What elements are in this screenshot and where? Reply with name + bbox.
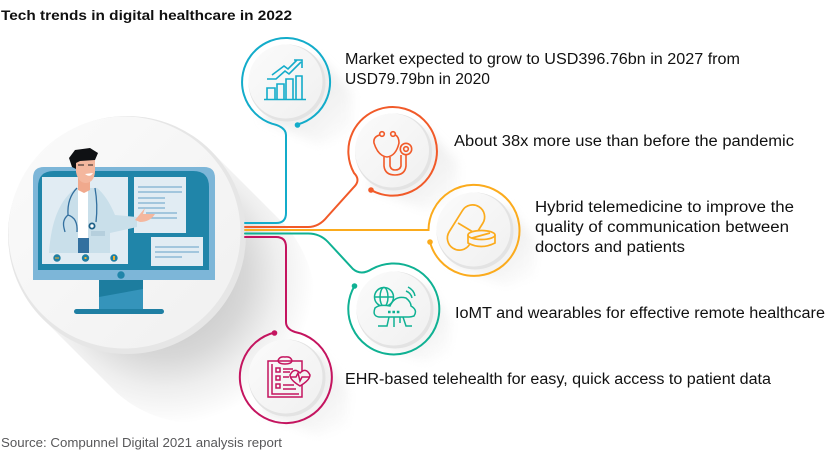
source note: Source: Compunnel Digital 2021 analysis report — [1, 435, 282, 450]
icon: bar chart with rising arrow — [264, 60, 306, 100]
icon: cloud network — [374, 287, 415, 327]
text: market growth: Market expected to grow to USD396.76bn in 2027 from — [345, 51, 740, 68]
text: EHR: EHR-based telehealth for easy, quick access to patient data — [345, 371, 771, 388]
disc: EHR clipboard — [248, 340, 326, 416]
disc: market growth — [248, 44, 326, 122]
connector: orange — [245, 107, 437, 227]
doctor video panel — [42, 148, 155, 264]
big circle long shadow — [42, 150, 315, 423]
text: IoMT: IoMT and wearables for effective remote healthcare — [455, 305, 825, 322]
connector: green — [245, 234, 439, 354]
text: market growth: USD79.79bn in 2020 — [345, 71, 490, 88]
soft disc shadows — [262, 58, 535, 435]
connector: yellow — [245, 185, 519, 276]
disc: stethoscope — [355, 114, 432, 190]
text: hybrid telemedicine: Hybrid telemedicine to improve the — [535, 199, 794, 216]
connector: blue — [242, 38, 330, 223]
disc: IoMT cloud — [356, 272, 434, 348]
doctor — [49, 148, 155, 253]
monitor — [33, 167, 215, 314]
text: hybrid telemedicine: doctors and patients — [535, 239, 685, 256]
text: usage: About 38x more use than before the pandemic — [454, 133, 794, 150]
panel: monitor illustration — [8, 116, 315, 423]
text: hybrid telemedicine — [535, 199, 794, 256]
text: hybrid telemedicine: quality of communication between — [535, 219, 789, 236]
big circle — [8, 116, 246, 354]
icon: clipboard with heart — [268, 357, 310, 397]
title: Tech trends in digital healthcare in 2022 — [1, 8, 292, 23]
document panels — [134, 177, 203, 266]
disc: pills — [436, 192, 514, 270]
icon: stethoscope — [374, 132, 412, 175]
connector: magenta — [240, 237, 332, 423]
icon: capsule and tablet — [443, 200, 495, 255]
text: market growth — [345, 51, 740, 88]
